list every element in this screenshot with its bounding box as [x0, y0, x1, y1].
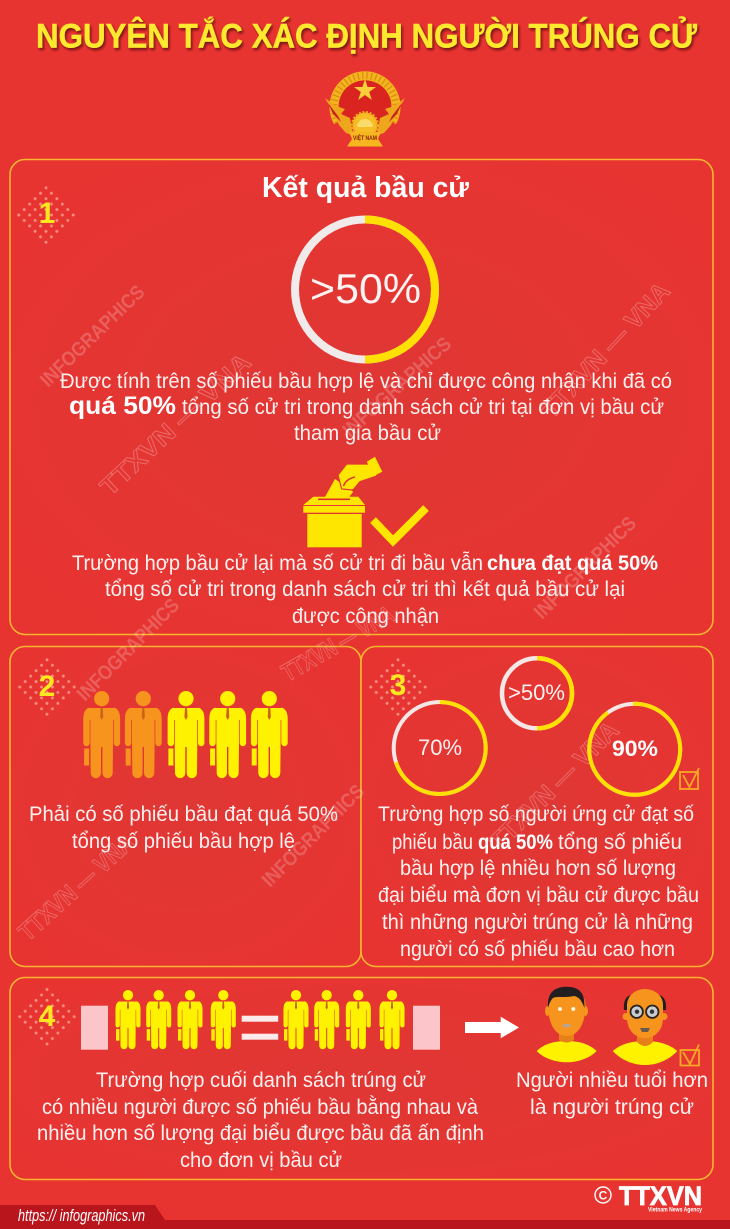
chart: over 50 percent ring: >50%	[310, 265, 421, 312]
logo: TTXVN copyright: TTXVN	[619, 1181, 702, 1211]
text block: older person wins	[516, 1069, 708, 1119]
badge: number 1	[13, 182, 79, 248]
chart: 90 percent ring	[589, 704, 680, 795]
text block: panel 3 rule: người có số phiếu bầu cao hơn	[400, 938, 675, 961]
watermarks	[13, 277, 676, 946]
text block: panel 3 rule: thì những người trúng cử là những	[382, 911, 693, 934]
panel 2 content	[14, 654, 338, 853]
panel 1 content	[13, 172, 672, 628]
text block: turnout rule: Được tính trên số phiếu bầu hợp lệ và chỉ được công nhận khi đã có	[60, 370, 672, 393]
text block: turnout rule: tổng số cử tri trong danh sách cử tri tại đơn vị bầu cử	[182, 396, 664, 419]
panel 4 content	[14, 984, 708, 1172]
arrow	[465, 1017, 519, 1038]
chart: over 50 percent ring: >50%	[508, 680, 565, 705]
badge: number 3: 3	[390, 669, 406, 702]
watermarks: TTXVN — VNA	[536, 277, 676, 424]
text block: tie rule: cho đơn vị bầu cử	[180, 1149, 342, 1172]
text block: turnout rule	[60, 370, 672, 445]
badge: number 4: 4	[39, 1000, 56, 1033]
logo: TTXVN copyright: C	[599, 1188, 608, 1202]
icon: checkbox	[680, 1044, 699, 1066]
watermarks: INFOGRAPHICS	[73, 595, 184, 706]
heading: Kết quả bầu cử	[262, 172, 469, 204]
text block: panel 2 rule: tổng số phiếu bầu hợp lệ	[72, 830, 295, 853]
icon: checkbox	[680, 768, 699, 789]
icon: five people, two orange three yellow	[83, 691, 288, 778]
chart: over 50 percent ring	[295, 220, 435, 360]
text block: tie rule	[37, 1069, 484, 1172]
panel: 4 frame	[10, 978, 713, 1180]
text block: panel 3 rule: tổng số phiếu	[558, 831, 682, 854]
watermarks: TTXVN — VNA	[484, 716, 624, 856]
text block: tie rule: Trường hợp cuối danh sách trúng cử	[96, 1069, 426, 1092]
text block: re-election rule: Trường hợp bầu cử lại mà số cử tri đi bầu vẫn	[72, 552, 483, 575]
text block: re-election rule	[72, 552, 658, 628]
footer url: https:// infographics.vn	[18, 1206, 145, 1225]
text block: turnout rule: tham gia bầu cử	[294, 422, 441, 445]
logo: TTXVN copyright	[595, 1181, 703, 1214]
watermarks: INFOGRAPHICS	[36, 281, 149, 392]
icon: younger man	[537, 987, 597, 1062]
watermarks: INFOGRAPHICS	[530, 513, 641, 624]
badge: number 2	[14, 654, 80, 720]
text block: panel 3 rule: quá 50%	[478, 831, 553, 854]
chart: 90 percent ring: 90%	[612, 736, 658, 761]
icon: ballot box with check	[303, 457, 426, 547]
chart: 70 percent ring	[394, 702, 486, 794]
panel: 2 frame	[10, 646, 361, 966]
panel 3 content	[365, 654, 699, 961]
logo: TTXVN copyright: Vietnam News Agency	[648, 1208, 703, 1214]
text block: re-election rule: được công nhận	[292, 605, 439, 628]
badge: number 1: 1	[39, 197, 55, 230]
icon: equal votes equation	[81, 990, 440, 1050]
chart: over 50 percent ring	[502, 658, 572, 728]
footer strip	[0, 1205, 730, 1229]
text block: older person wins: là người trúng cử	[530, 1096, 694, 1119]
text block: panel 3 rule: phiếu bầu	[392, 831, 473, 854]
text block: tie rule: có nhiều người được số phiếu bầu bằng nhau và	[42, 1096, 478, 1119]
text block: older person wins: Người nhiều tuổi hơn	[516, 1069, 708, 1092]
text block: panel 3 rule: Trường hợp số người ứng cử đạt số	[378, 803, 694, 826]
badge: number 2: 2	[39, 670, 55, 703]
chart: 70 percent ring: 70%	[418, 735, 462, 760]
badge: number 3	[365, 654, 431, 720]
panel: 1 election result frame	[10, 160, 713, 634]
icon: national emblem: VIỆT NAM	[353, 134, 377, 142]
watermarks: INFOGRAPHICS	[258, 781, 369, 892]
text block: tie rule: nhiều hơn số lượng đại biểu được bầu đã ấn định	[37, 1122, 484, 1145]
watermarks: TTXVN — VNA	[277, 600, 399, 687]
text block: panel 2 rule	[29, 803, 338, 853]
text block: turnout rule: quá 50%	[69, 392, 176, 420]
text block: panel 3 rule: đại biểu mà đơn vị bầu cử được bầu	[378, 884, 699, 907]
text block: panel 2 rule: Phải có số phiếu bầu đạt quá 50%	[29, 803, 338, 826]
watermarks: TTXVN — VNA	[13, 829, 140, 946]
text block: panel 3 rule	[378, 803, 699, 961]
text block: panel 3 rule: bầu hợp lệ nhiều hơn số lượng	[400, 857, 676, 880]
text block: re-election rule: chưa đạt quá 50%	[487, 552, 658, 575]
badge: number 4	[14, 984, 80, 1049]
icon: national emblem	[325, 76, 405, 146]
panel: 3 frame	[361, 646, 713, 966]
watermarks: TTXVN — VNA	[95, 348, 257, 501]
text block: re-election rule: tổng số cử tri trong danh sách cử tri thì kết quả bầu cử lại	[105, 578, 625, 601]
watermarks: INFOGRAPHICS	[339, 333, 456, 442]
icon: older man with glasses	[613, 989, 677, 1065]
